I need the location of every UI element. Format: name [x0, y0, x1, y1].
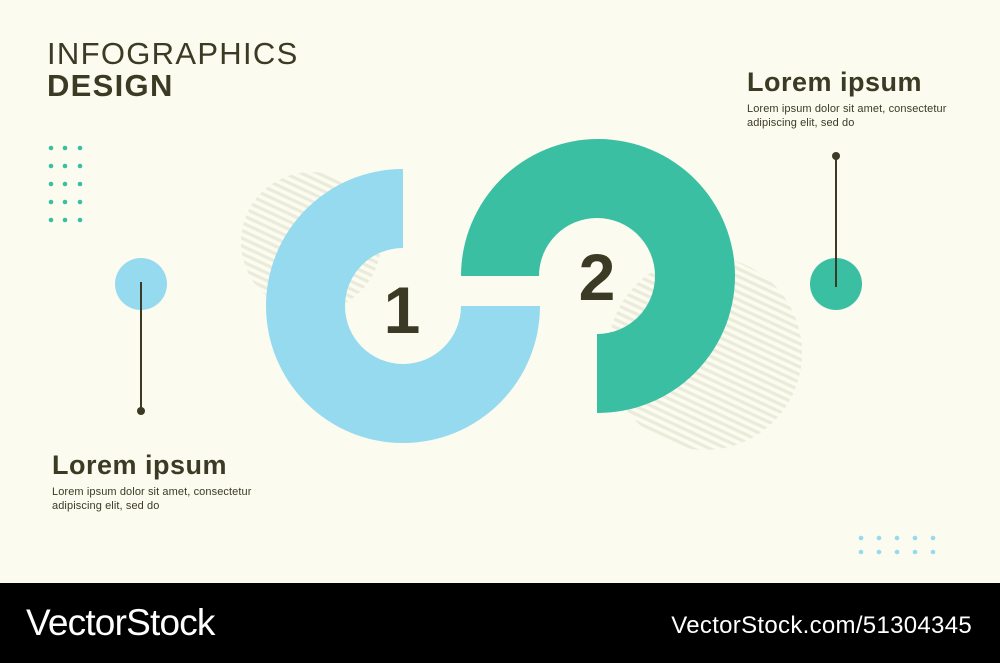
- hatch circle 1: [241, 172, 381, 312]
- text block right: Lorem ipsum dolor sit amet, consectetur: [747, 103, 947, 115]
- text block right: adipiscing elit, sed do: [747, 117, 854, 129]
- title: INFOGRAPHICS: [47, 36, 299, 71]
- hatch circle 2: [608, 256, 802, 450]
- text block right: [747, 67, 947, 129]
- text block right: Lorem ipsum: [747, 67, 922, 97]
- footer bar: VectorStock.com/51304345: [671, 612, 972, 639]
- ring 2 green: [461, 139, 735, 413]
- number 2: 2: [579, 240, 615, 314]
- dots: blue grid: [859, 536, 935, 554]
- text block left: Lorem ipsum dolor sit amet, consectetur: [52, 486, 252, 498]
- text block left: adipiscing elit, sed do: [52, 500, 159, 512]
- title: DESIGN: [47, 68, 174, 103]
- marker left: [115, 258, 167, 415]
- text block left: [52, 450, 252, 512]
- dots: teal grid: [49, 146, 82, 222]
- text block left: Lorem ipsum: [52, 450, 227, 480]
- footer bar: VectorStock: [26, 602, 215, 643]
- ring 1 blue: [266, 169, 540, 443]
- footer bar: [0, 583, 1000, 663]
- number 1: 1: [384, 273, 420, 347]
- marker right: [810, 152, 862, 310]
- title: [47, 36, 299, 103]
